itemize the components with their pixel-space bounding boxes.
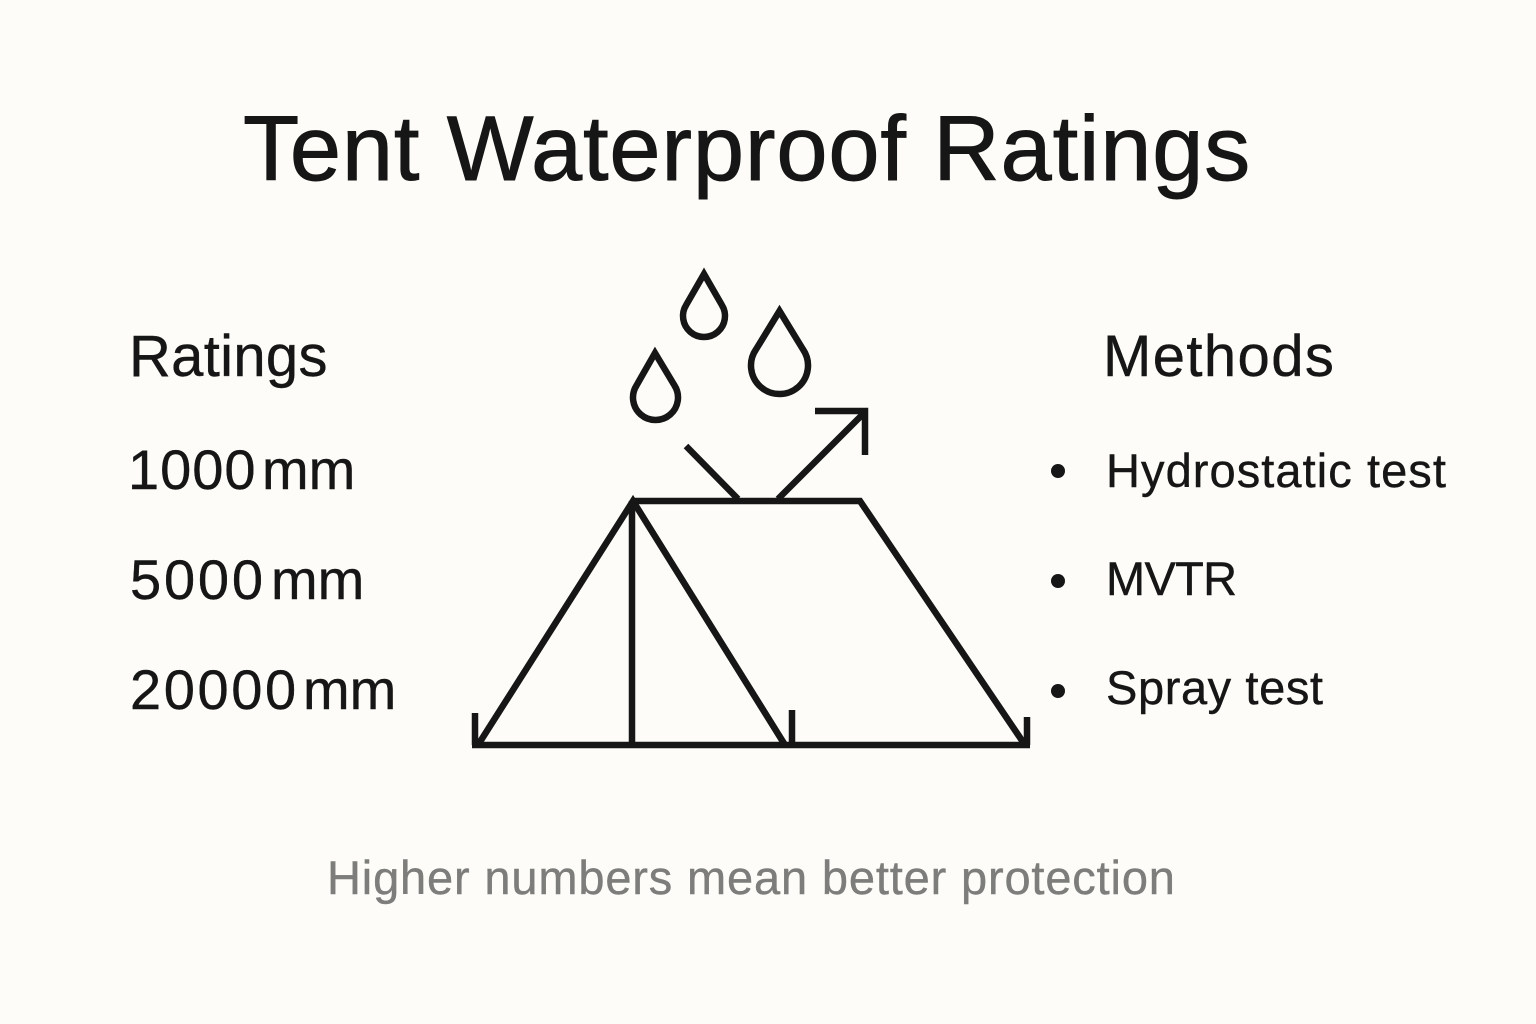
icon: water drop right: [751, 311, 808, 394]
method: spray test: Spray test: [1106, 661, 1324, 714]
footer note: Higher numbers mean better protection: [327, 851, 1176, 904]
rating 5000 mm: [130, 548, 364, 611]
method: hydrostatic test: Hydrostatic test: [1106, 444, 1447, 497]
icon: deflected arrow: [686, 411, 865, 499]
rating 20000 mm: [130, 658, 396, 721]
rating 1000 mm: 1000: [128, 438, 257, 501]
rating 1000 mm: [128, 438, 355, 501]
bullet: [1051, 464, 1065, 478]
ratings heading: Ratings: [129, 324, 328, 389]
rating 5000 mm: 5000: [130, 548, 266, 611]
method: MVTR: MVTR: [1106, 552, 1236, 605]
icon: water drop middle: [683, 274, 725, 337]
rating 20000 mm: 20000: [130, 658, 299, 721]
icon: tent: [472, 501, 1030, 745]
icon: water drop left: [633, 353, 678, 420]
methods heading: Methods: [1103, 324, 1335, 389]
bullet: [1051, 574, 1065, 588]
bullet: [1051, 684, 1065, 698]
panel: ratings: [128, 324, 396, 721]
rating 20000 mm: mm: [303, 658, 396, 721]
rating 1000 mm: mm: [262, 438, 355, 501]
title: Tent Waterproof Ratings: [243, 98, 1251, 200]
panel: methods: [1051, 324, 1447, 714]
rating 5000 mm: mm: [271, 548, 364, 611]
